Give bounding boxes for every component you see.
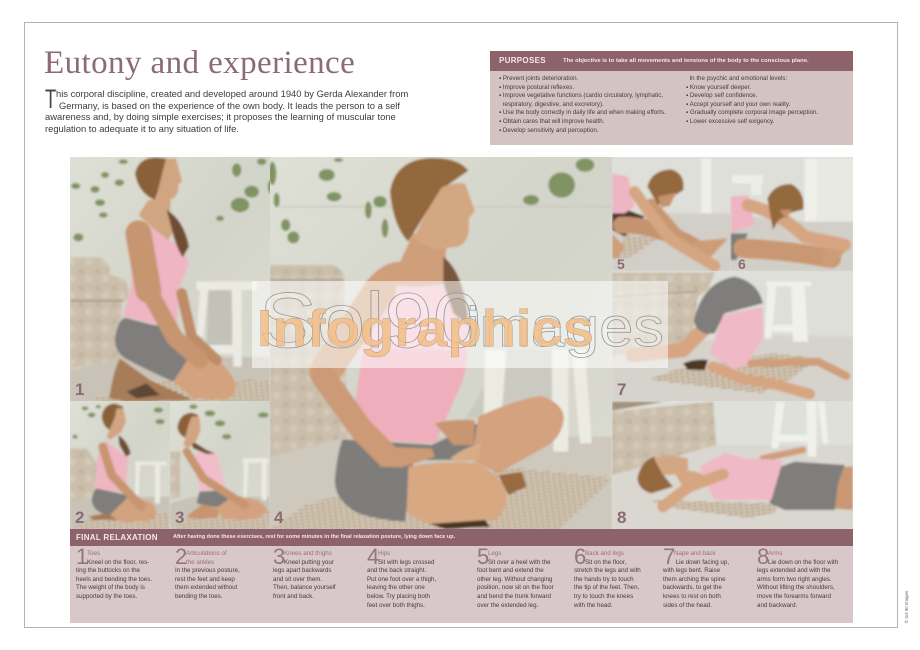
intro text: Germany, is based on the experience of the own body. It leads the person to a self xyxy=(59,100,400,111)
step 4: 4 xyxy=(367,544,379,569)
step 3 xyxy=(273,544,336,600)
step 3: front and back. xyxy=(273,593,314,600)
photo numbers xyxy=(75,256,746,527)
photo 1: kneeling on toes xyxy=(70,157,270,401)
purposes list: physical: ▪ Develop sensitivity and perception. xyxy=(499,127,599,134)
purposes list: psychic: ▪ Gradually complete corporal image perception. xyxy=(686,109,818,116)
photo numbers: 7 xyxy=(617,380,626,399)
step 5 xyxy=(477,544,554,609)
photo 5: leg stretch xyxy=(612,157,730,271)
step 5: Legs xyxy=(488,550,501,557)
step 1: 1 xyxy=(76,544,88,569)
step 2: bending the toes. xyxy=(175,593,222,600)
step 7: knees to rest on both xyxy=(663,593,721,600)
purposes heading: PURPOSES xyxy=(499,56,546,65)
photo numbers: 4 xyxy=(274,508,284,527)
purposes list: physical: ▪ Improve vegetative functions (cardio circulatory, lymphatic, xyxy=(499,92,663,99)
step 5: over the extended leg. xyxy=(477,602,538,609)
watermark: Infographics: Infographics xyxy=(257,300,594,358)
step 2 xyxy=(175,544,240,600)
photo 4: sitting with legs crossed xyxy=(270,157,612,529)
step 4: and the back straight. xyxy=(367,567,426,574)
step 2: rest the feet and keep xyxy=(175,576,235,583)
photo 8: arms xyxy=(612,401,853,529)
step 5: other leg. Without changing xyxy=(477,576,552,583)
intro text xyxy=(45,84,408,134)
step 1 xyxy=(76,544,152,600)
purposes list: physical: respiratory, digestive, and excretory). xyxy=(502,101,604,108)
step 6: the hands try to touch xyxy=(574,576,634,583)
step 8: 8 xyxy=(757,544,769,569)
step 5: and bend the trunk forward xyxy=(477,593,551,600)
title: Eutony and experience xyxy=(44,45,355,81)
step 6: with the head. xyxy=(574,602,613,609)
photo numbers: 3 xyxy=(175,508,184,527)
step 8: and backward. xyxy=(757,602,797,609)
step 5: position, now sit on the floor xyxy=(477,584,554,591)
step 3: and sit over them. xyxy=(273,576,322,583)
intro text: awareness and, by doing simple exercises; it proposes the learning of muscular tone xyxy=(45,111,396,122)
photo 6: head to knees xyxy=(730,157,853,271)
watermark: Sol90images: images xyxy=(466,295,664,358)
step 8: Arms xyxy=(768,550,782,557)
photo numbers: 6 xyxy=(738,256,746,272)
purposes list: psychic: In the psychic and emotional levels: xyxy=(689,75,787,82)
step 8 xyxy=(757,544,838,609)
intro text: his corporal discipline, created and developed around 1940 by Gerda Alexander from xyxy=(56,88,408,99)
intro text: regulation to adequate it to any situation of life. xyxy=(45,123,239,134)
photo numbers: 5 xyxy=(617,256,625,272)
step 7: Nape and back xyxy=(674,550,716,557)
step 2: 2 xyxy=(175,544,187,569)
photo numbers: 2 xyxy=(75,508,84,527)
step 3: Knees and thighs xyxy=(284,550,332,557)
step 7: 7 xyxy=(663,544,675,569)
watermark band xyxy=(252,281,668,368)
final relaxation header bar xyxy=(70,529,853,546)
purposes list: psychic: ▪ Know yourself deeper. xyxy=(686,84,751,91)
purposes list: physical: ▪ Obtain cares that will improve health. xyxy=(499,118,604,125)
step 6 xyxy=(574,544,641,609)
step 6: stretch the legs and with xyxy=(574,567,641,574)
purposes list: physical: ▪ Prevent joints deterioration. xyxy=(499,75,578,82)
step 3: Then, balance yourself xyxy=(273,584,336,591)
purposes list: physical: ▪ Improve postural reflexes. xyxy=(499,84,574,91)
step 8: Without lifting the shoulders, xyxy=(757,584,835,591)
step 1: supported by the toes. xyxy=(76,593,137,600)
purposes list: physical: ▪ Use the body correctly in daily life and when making efforts. xyxy=(499,109,666,116)
step 2: them extended without xyxy=(175,584,237,591)
step 6: try to touch the knees xyxy=(574,593,633,600)
step 6: 6 xyxy=(574,544,586,569)
step 5: Sit over a heel with the xyxy=(488,559,551,566)
step 4: Sit with legs crossed xyxy=(378,559,434,566)
step 1: The weight of the body is xyxy=(76,584,145,591)
purposes list: psychic xyxy=(686,75,818,125)
final relaxation heading: FINAL RELAXATION xyxy=(76,533,158,542)
step 4: Hips xyxy=(378,550,390,557)
panel: purposes xyxy=(490,51,853,145)
step 2: Articulations of xyxy=(186,550,227,557)
step 3: legs apart backwards xyxy=(273,567,331,574)
step 1: heels and bending the toes. xyxy=(76,576,152,583)
purposes list: psychic: ▪ Accept yourself and your own reality. xyxy=(686,101,790,108)
step 1: ting the buttocks on the xyxy=(76,567,140,574)
step 7: backwards, to get the xyxy=(663,584,722,591)
panel: final relaxation xyxy=(70,529,853,623)
watermark: Sol90images xyxy=(259,276,664,364)
step 7: Lie down facing up, xyxy=(676,559,729,566)
step 6: Back and legs xyxy=(585,550,624,557)
step 2: In the previous posture, xyxy=(175,567,240,574)
step 2: the ankles xyxy=(186,559,214,566)
photo numbers: 8 xyxy=(617,508,626,527)
photo numbers: 1 xyxy=(75,380,84,399)
step 4 xyxy=(367,544,436,609)
step 1: Kneel on the floor, res- xyxy=(87,559,149,566)
step 3: Kneel putting your xyxy=(284,559,334,566)
step 1: Toes xyxy=(87,550,100,557)
step 4: feet over both thighs. xyxy=(367,602,425,609)
step 7 xyxy=(663,544,729,609)
step 4: Put one foot over a thigh, xyxy=(367,576,436,583)
photo 3: leaning back on feet xyxy=(170,401,270,529)
step 5: foot bent and extend the xyxy=(477,567,544,574)
image credit: © Sol 90 Images xyxy=(904,591,909,623)
purposes header bar xyxy=(490,51,853,71)
step 6: the tip of the feet. Then, xyxy=(574,584,639,591)
purposes list: psychic: ▪ Develop self confidence. xyxy=(686,92,757,99)
step 8: Lie down on the floor with xyxy=(768,559,838,566)
step 8: legs extended and with the xyxy=(757,567,831,574)
drop cap: T xyxy=(45,84,56,114)
watermark: Sol90images: Sol90 xyxy=(259,276,481,364)
purposes list: psychic: ▪ Lower excessive self exigency. xyxy=(686,118,774,125)
step 7: sides of the head. xyxy=(663,602,712,609)
purposes list: physical xyxy=(499,75,666,134)
step 7: them arching the spine xyxy=(663,576,726,583)
step 3: 3 xyxy=(273,544,285,569)
step 6: Sit on the floor, xyxy=(585,559,626,566)
step 4: leaving the other one xyxy=(367,584,425,591)
step 7: with legs bent. Raise xyxy=(663,567,720,574)
step 8: arms form two right angles. xyxy=(757,576,832,583)
photo 2: ankles xyxy=(70,401,170,529)
final relaxation note: After having done these exercises, rest for some minutes in the final relaxation posture, lying down face up. xyxy=(173,534,455,540)
step 4: below. Try placing both xyxy=(367,593,430,600)
step 5: 5 xyxy=(477,544,489,569)
photo 7: nape and back xyxy=(612,271,853,401)
purposes objective: The objective is to take all movements and tensions of the body to the conscious plane. xyxy=(563,58,809,64)
step 8: move the forearms forward xyxy=(757,593,831,600)
